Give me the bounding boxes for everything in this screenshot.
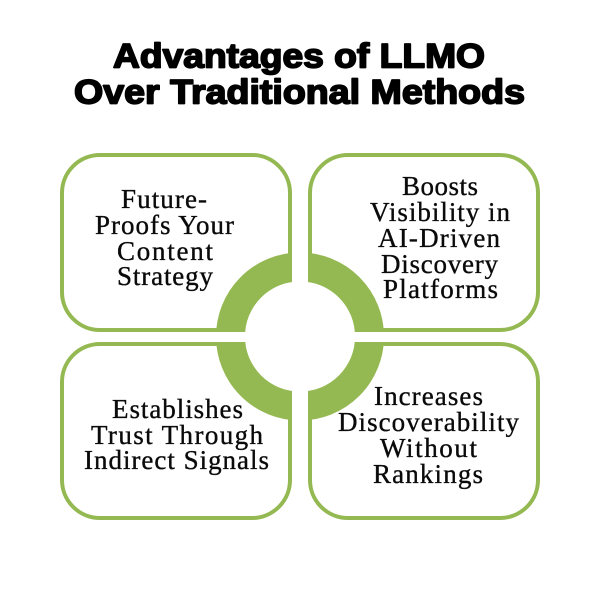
panel: boosts visibility: [310, 155, 538, 330]
panel: establishes trust: Trust Through: [91, 420, 264, 450]
panel: future-proofs content strategy: Future-: [121, 184, 207, 214]
title: Advantages of LLMO: [113, 38, 485, 76]
panel: future-proofs content strategy: Content: [117, 236, 213, 266]
panel: establishes trust: Indirect Signals: [84, 445, 269, 475]
panel: boosts visibility: Boosts: [402, 171, 478, 201]
panel: boosts visibility: Platforms: [383, 274, 498, 304]
panel: increases discoverability: [310, 344, 538, 518]
panel: future-proofs content strategy: [62, 155, 290, 330]
panel: increases discoverability: Without: [380, 433, 477, 463]
panel: establishes trust: [62, 344, 290, 518]
panel: future-proofs content strategy: Proofs Your: [95, 210, 234, 240]
panel: boosts visibility: AI-Driven: [378, 223, 500, 253]
panel: increases discoverability: Discoverability: [338, 407, 520, 437]
panel: boosts visibility: Discovery: [381, 249, 498, 279]
title: Over Traditional Methods: [74, 74, 525, 112]
panel: increases discoverability: Rankings: [373, 459, 483, 489]
title: [74, 38, 525, 112]
panel: establishes trust: Establishes: [112, 394, 243, 424]
center ring: [208, 245, 392, 428]
panel: future-proofs content strategy: Strategy: [117, 261, 214, 291]
panel: boosts visibility: Visibility in: [370, 197, 510, 227]
panel: increases discoverability: Increases: [374, 381, 483, 411]
